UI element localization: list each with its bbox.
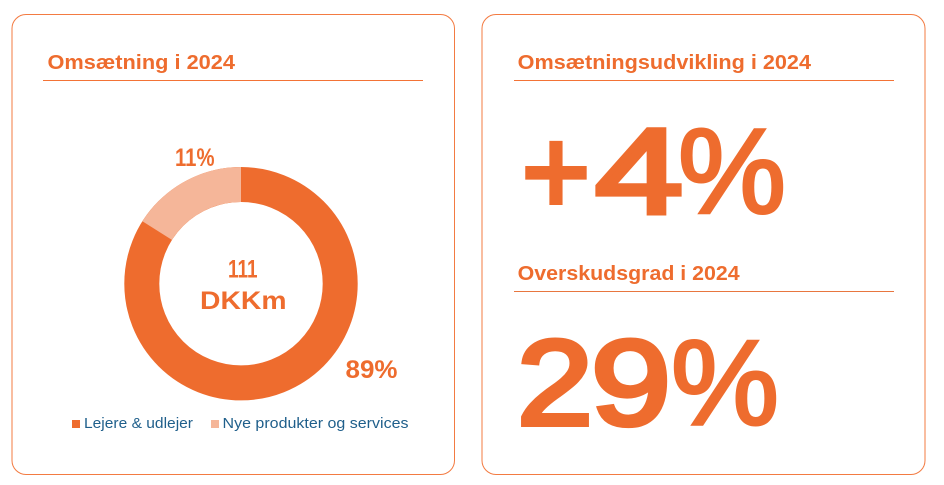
- big number: +4%: 4: [595, 103, 683, 239]
- legend label: Lejere & udlejer: Lejere & udlejer: [84, 415, 193, 432]
- panel: growth and margin: [482, 14, 925, 474]
- heading rule: [514, 291, 894, 292]
- big number: +4%: %: [678, 103, 786, 239]
- heading: revenue: Omsætning i 2024: [48, 52, 236, 74]
- legend swatch: Nye produkter og services: [211, 420, 219, 428]
- segment: Nye produkter og services 11%: [142, 167, 241, 240]
- big number: 29%: 2: [517, 314, 593, 450]
- legend label: Nye produkter og services: Nye produkter og services: [222, 415, 408, 432]
- donut center value: 111: [228, 255, 258, 283]
- legend swatch: Lejere & udlejer: [72, 420, 80, 428]
- legend: [72, 415, 408, 432]
- segment: Lejere & udlejer 89%: [142, 185, 340, 383]
- panel: revenue: [12, 14, 454, 474]
- big number: 29%: 9: [591, 314, 671, 450]
- big number: 29%: %: [671, 314, 779, 450]
- donut center unit: DKKm: [200, 287, 286, 315]
- big number: +4%: +: [522, 103, 590, 239]
- heading: profit margin: Overskudsgrad i 2024: [518, 263, 741, 285]
- heading rule: [43, 80, 423, 81]
- label: 11%: 11%: [175, 144, 214, 172]
- heading: revenue growth: Omsætningsudvikling i 2024: [518, 52, 812, 74]
- donut chart: [142, 167, 340, 383]
- label: 89%: 89%: [346, 356, 398, 384]
- heading rule: [514, 80, 894, 81]
